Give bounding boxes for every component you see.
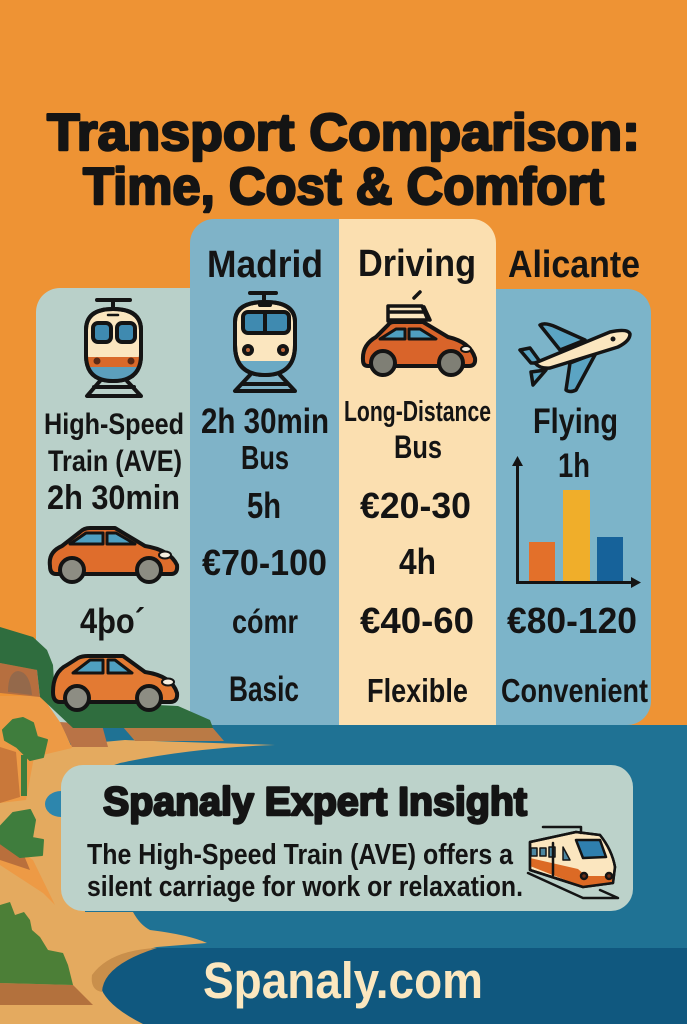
column 2 text [201, 244, 329, 709]
column 2 text: 5h [247, 485, 281, 526]
icon: high-speed train front [86, 300, 141, 396]
insight text: silent carriage for work or relaxation. [87, 871, 523, 903]
column 4 text: 1h [558, 447, 590, 485]
column 3 text: 4h [399, 541, 436, 582]
insight text: The High-Speed Train (AVE) offers a [87, 839, 514, 871]
bar: yellow [563, 490, 590, 581]
insight text [87, 839, 523, 903]
column 3 text: Bus [394, 429, 442, 465]
bar: orange [529, 542, 555, 581]
column 4 text: €80-120 [507, 600, 637, 641]
column 1 text: Train (AVE) [48, 445, 182, 478]
bar: blue [597, 537, 623, 581]
column 2 text: 2h 30min [201, 402, 329, 441]
insight heading: Spanaly Expert Insight [103, 780, 527, 824]
column 4 text: Convenient [501, 672, 648, 709]
title: Time, Cost & Comfort [83, 158, 604, 216]
column 1 text: 2h 30min [47, 479, 180, 517]
column 1 text: High-Speed [44, 408, 184, 441]
panel: expert insight [61, 765, 633, 911]
icon: car on green hill [53, 656, 177, 710]
panel: Driving column [339, 219, 496, 725]
title: Transport Comparison: [47, 104, 640, 162]
column 4 text: Alicante [508, 244, 640, 286]
column 2 text: Bus [241, 439, 289, 476]
column 1 text: 4þo´ [80, 602, 145, 641]
icon: airplane [520, 324, 630, 392]
column 2 text: €70-100 [202, 542, 327, 583]
panel: Alicante column [496, 289, 651, 725]
footer brand: Spanaly.com [203, 952, 483, 1009]
panel: high-speed train column [36, 288, 190, 725]
column 2 text: Madrid [207, 244, 323, 286]
axis arrowheads [512, 456, 641, 588]
panel: Madrid column [190, 219, 339, 725]
chart axes [518, 460, 636, 582]
title [47, 104, 640, 216]
column 3 text: €40-60 [360, 600, 474, 641]
column 4 text: Flying [533, 402, 618, 441]
icon: car in column 1 [50, 528, 177, 582]
column 2 text: Basic [229, 670, 299, 709]
column 3 text: €20-30 [360, 485, 471, 526]
icon: middle bush [0, 810, 43, 857]
column 3 text [344, 243, 491, 709]
icon: Madrid train front [235, 293, 295, 391]
column 3 text: Flexible [367, 672, 468, 709]
column 4 text [501, 244, 648, 709]
icon: lower bush [0, 902, 73, 985]
column 1 text [44, 408, 184, 641]
column 2 text: cómr [232, 603, 298, 640]
icon: side-view train [528, 827, 618, 898]
landscape: coastal cliffs [0, 627, 275, 1024]
column 3 text: Driving [358, 243, 476, 285]
bar chart [512, 456, 641, 588]
icon: tree on cliff [3, 718, 47, 796]
icon: car with roof rack [363, 292, 475, 375]
column 3 text: Long-Distance [344, 396, 491, 428]
